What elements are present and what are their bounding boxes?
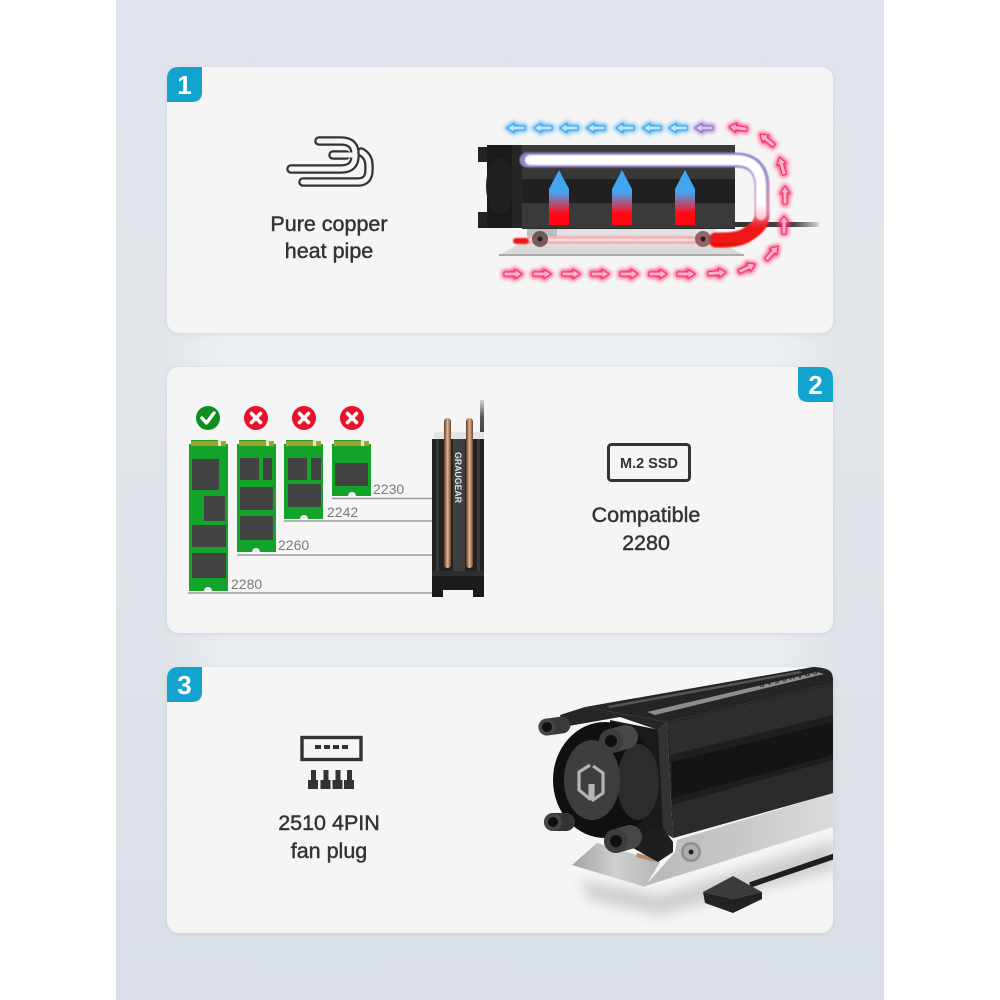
heading: 2510 4pin fan plug <box>278 811 380 863</box>
size labels: 2280 <box>231 576 262 592</box>
aluminium base <box>572 793 833 887</box>
ssd 2230 <box>332 440 371 500</box>
panel 3: fan plug <box>167 667 835 933</box>
heat sink top fins: GRAUGEAR <box>758 667 818 687</box>
heading: compatible 2280: 2280 <box>622 531 670 555</box>
heading: pure copper heat pipe: Pure copper <box>270 212 388 236</box>
heading: 2510 4pin fan plug: fan plug <box>291 839 367 863</box>
fan logo <box>579 765 603 800</box>
heading: 2510 4pin fan plug: 2510 4PIN <box>278 811 380 835</box>
icon: check <box>196 406 220 430</box>
heat sink side diagram <box>478 122 819 279</box>
background <box>116 0 884 1000</box>
icon: copper heat pipes <box>291 141 369 182</box>
heat sink top view <box>432 400 484 597</box>
size labels: 2260 <box>278 537 309 553</box>
size labels: 2230 <box>373 481 404 497</box>
product photo: fan heat sink <box>538 667 835 915</box>
panel 2: compatibility <box>167 367 833 633</box>
ssd 2260 <box>237 440 276 556</box>
icon: cross 2230 <box>340 406 364 430</box>
badge 2 <box>798 367 833 402</box>
panel 1: heat pipe <box>167 67 833 333</box>
icon: cross 2242 <box>292 406 316 430</box>
heat sink top view: GRAUGEAR <box>452 452 463 503</box>
size labels: 2242 <box>327 504 358 520</box>
size labels <box>231 481 404 592</box>
hot air arrows <box>504 122 790 279</box>
heading: pure copper heat pipe <box>270 212 388 263</box>
heat sink side <box>667 683 833 838</box>
heat pipe: hot and cold <box>516 160 762 241</box>
heading: pure copper heat pipe: heat pipe <box>285 239 373 263</box>
airflow arrows <box>549 170 695 225</box>
fan frame <box>553 707 673 862</box>
base plate <box>499 229 744 256</box>
cold air arrows <box>507 123 713 133</box>
cable <box>735 222 819 227</box>
badge 3: 3 <box>177 670 192 700</box>
cable and connector <box>703 856 835 913</box>
size guide lines <box>188 498 433 593</box>
heading: compatible 2280 <box>592 503 700 555</box>
mount posts <box>538 718 630 853</box>
ssd 2242 <box>284 440 323 523</box>
screws <box>532 231 711 247</box>
icon: 4pin plug <box>302 738 361 789</box>
badge 3 <box>167 667 202 702</box>
fan <box>478 145 522 228</box>
badge 1 <box>167 67 202 102</box>
base screw <box>681 842 701 862</box>
icon: cross 2260 <box>244 406 268 430</box>
heat sink body <box>522 145 735 229</box>
badge 1: 1 <box>177 70 192 100</box>
heading: compatible 2280: Compatible <box>592 503 700 527</box>
heat sink top fins <box>585 667 833 722</box>
icon: m.2 ssd label: M.2 SSD <box>620 456 678 472</box>
badge 2: 2 <box>808 370 823 400</box>
icon: m.2 ssd label <box>608 444 690 480</box>
ssd 2280 <box>189 440 228 595</box>
